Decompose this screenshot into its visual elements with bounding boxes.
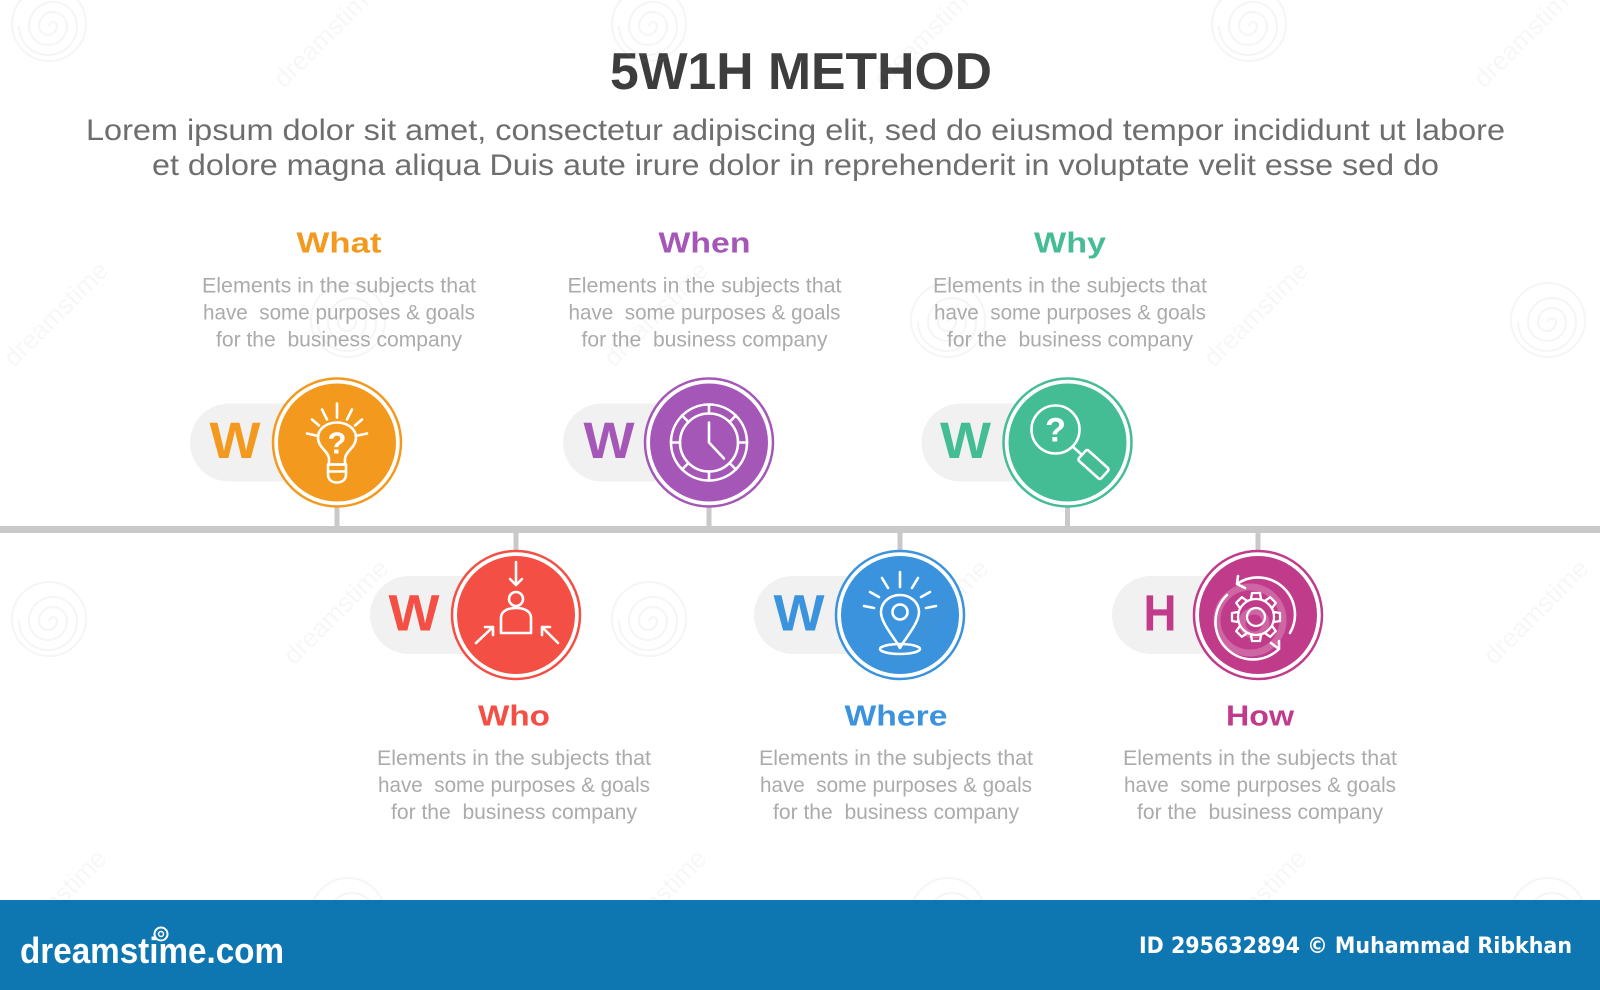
- text block: How: [1123, 700, 1397, 824]
- text block: When: have some purposes & goals: [568, 302, 840, 324]
- text block: What: Elements in the subjects that: [202, 274, 476, 298]
- watermark swirl on How circle: [1217, 587, 1283, 653]
- text block: Why: Elements in the subjects that: [933, 274, 1207, 298]
- watermark pattern: dreamstime: [597, 255, 714, 372]
- watermark pattern: dreamstime: [595, 843, 712, 960]
- node: Why: [922, 378, 1132, 506]
- text block: When: [568, 228, 842, 352]
- node: When: [563, 378, 773, 506]
- node: What: [190, 378, 401, 506]
- text block: Who: Elements in the subjects that: [377, 747, 651, 770]
- text block: Where: Elements in the subjects that: [759, 747, 1033, 770]
- icon: location pin with rays: [864, 572, 936, 654]
- icon: gear with cycle arrows: [1216, 576, 1295, 659]
- node: Why: W: [940, 412, 992, 469]
- node: What: W: [210, 412, 261, 469]
- text block: Why: for the business company: [947, 328, 1193, 352]
- text block: Where: for the business company: [773, 801, 1019, 824]
- footer bar: [0, 900, 1600, 990]
- text block: Where: Where: [844, 700, 948, 732]
- text block: Why: Why: [1034, 228, 1106, 260]
- text block: How: have some purposes & goals: [1124, 774, 1396, 797]
- watermark pattern: dreamstime: [1197, 255, 1314, 372]
- text block: When: Elements in the subjects that: [568, 274, 842, 298]
- text block: What: for the business company: [216, 328, 462, 352]
- watermark pattern: dreamstime: [0, 255, 114, 372]
- icon: magnifier with question mark: [1032, 406, 1109, 480]
- icon: light bulb with question mark: [307, 404, 367, 482]
- icon: person with arrows: [476, 562, 558, 643]
- text block: Who: Who: [478, 700, 550, 732]
- text block: How: How: [1226, 700, 1294, 732]
- icon: light bulb with question mark: ?: [328, 426, 346, 460]
- text block: When: for the business company: [582, 328, 828, 352]
- text block: What: What: [296, 228, 382, 260]
- text block: Where: have some purposes & goals: [760, 774, 1032, 797]
- footer credit: ID 295632894 © Muhammad Ribkhan: [1139, 934, 1572, 959]
- node: Who: W: [388, 584, 440, 642]
- text block: How: for the business company: [1137, 801, 1383, 824]
- node: When: W: [584, 412, 635, 469]
- title: 5W1H METHOD: [610, 43, 992, 101]
- subtitle text: Lorem ipsum dolor sit amet, consectetur adipiscing elit, sed do eiusmod tempor incididunt ut labore: [86, 114, 1505, 147]
- node: How: [1112, 551, 1322, 679]
- node: Where: [754, 551, 964, 679]
- text block: Who: for the business company: [391, 801, 637, 824]
- text block: Who: [377, 700, 651, 824]
- node: How: H: [1144, 584, 1176, 642]
- footer logo: dreamstime.com: [20, 930, 284, 971]
- icon: clock: [671, 404, 747, 480]
- text block: How: Elements in the subjects that: [1123, 747, 1397, 770]
- text block: Why: [933, 228, 1207, 352]
- timeline axis: [0, 506, 1600, 552]
- text block: What: have some purposes & goals: [203, 302, 475, 324]
- subtitle text: et dolore magna aliqua Duis aute irure dolor in reprehenderit in voluptate velit esse sed do: [152, 149, 1439, 182]
- node: Who: [370, 551, 580, 679]
- text block: When: When: [658, 228, 750, 260]
- text block: Why: have some purposes & goals: [934, 302, 1206, 324]
- watermark pattern: dreamstime: [1195, 843, 1312, 960]
- watermark pattern: dreamstime: [1477, 553, 1594, 670]
- node: Where: W: [774, 584, 825, 642]
- text block: Who: have some purposes & goals: [378, 774, 650, 797]
- watermark pattern: dreamstime: [277, 553, 394, 670]
- subtitle text: [86, 114, 1505, 182]
- text block: What: [202, 228, 476, 352]
- text block: Where: [759, 700, 1033, 824]
- icon: magnifier with question mark: ?: [1045, 412, 1066, 450]
- watermark pattern: dreamstime: [877, 553, 994, 670]
